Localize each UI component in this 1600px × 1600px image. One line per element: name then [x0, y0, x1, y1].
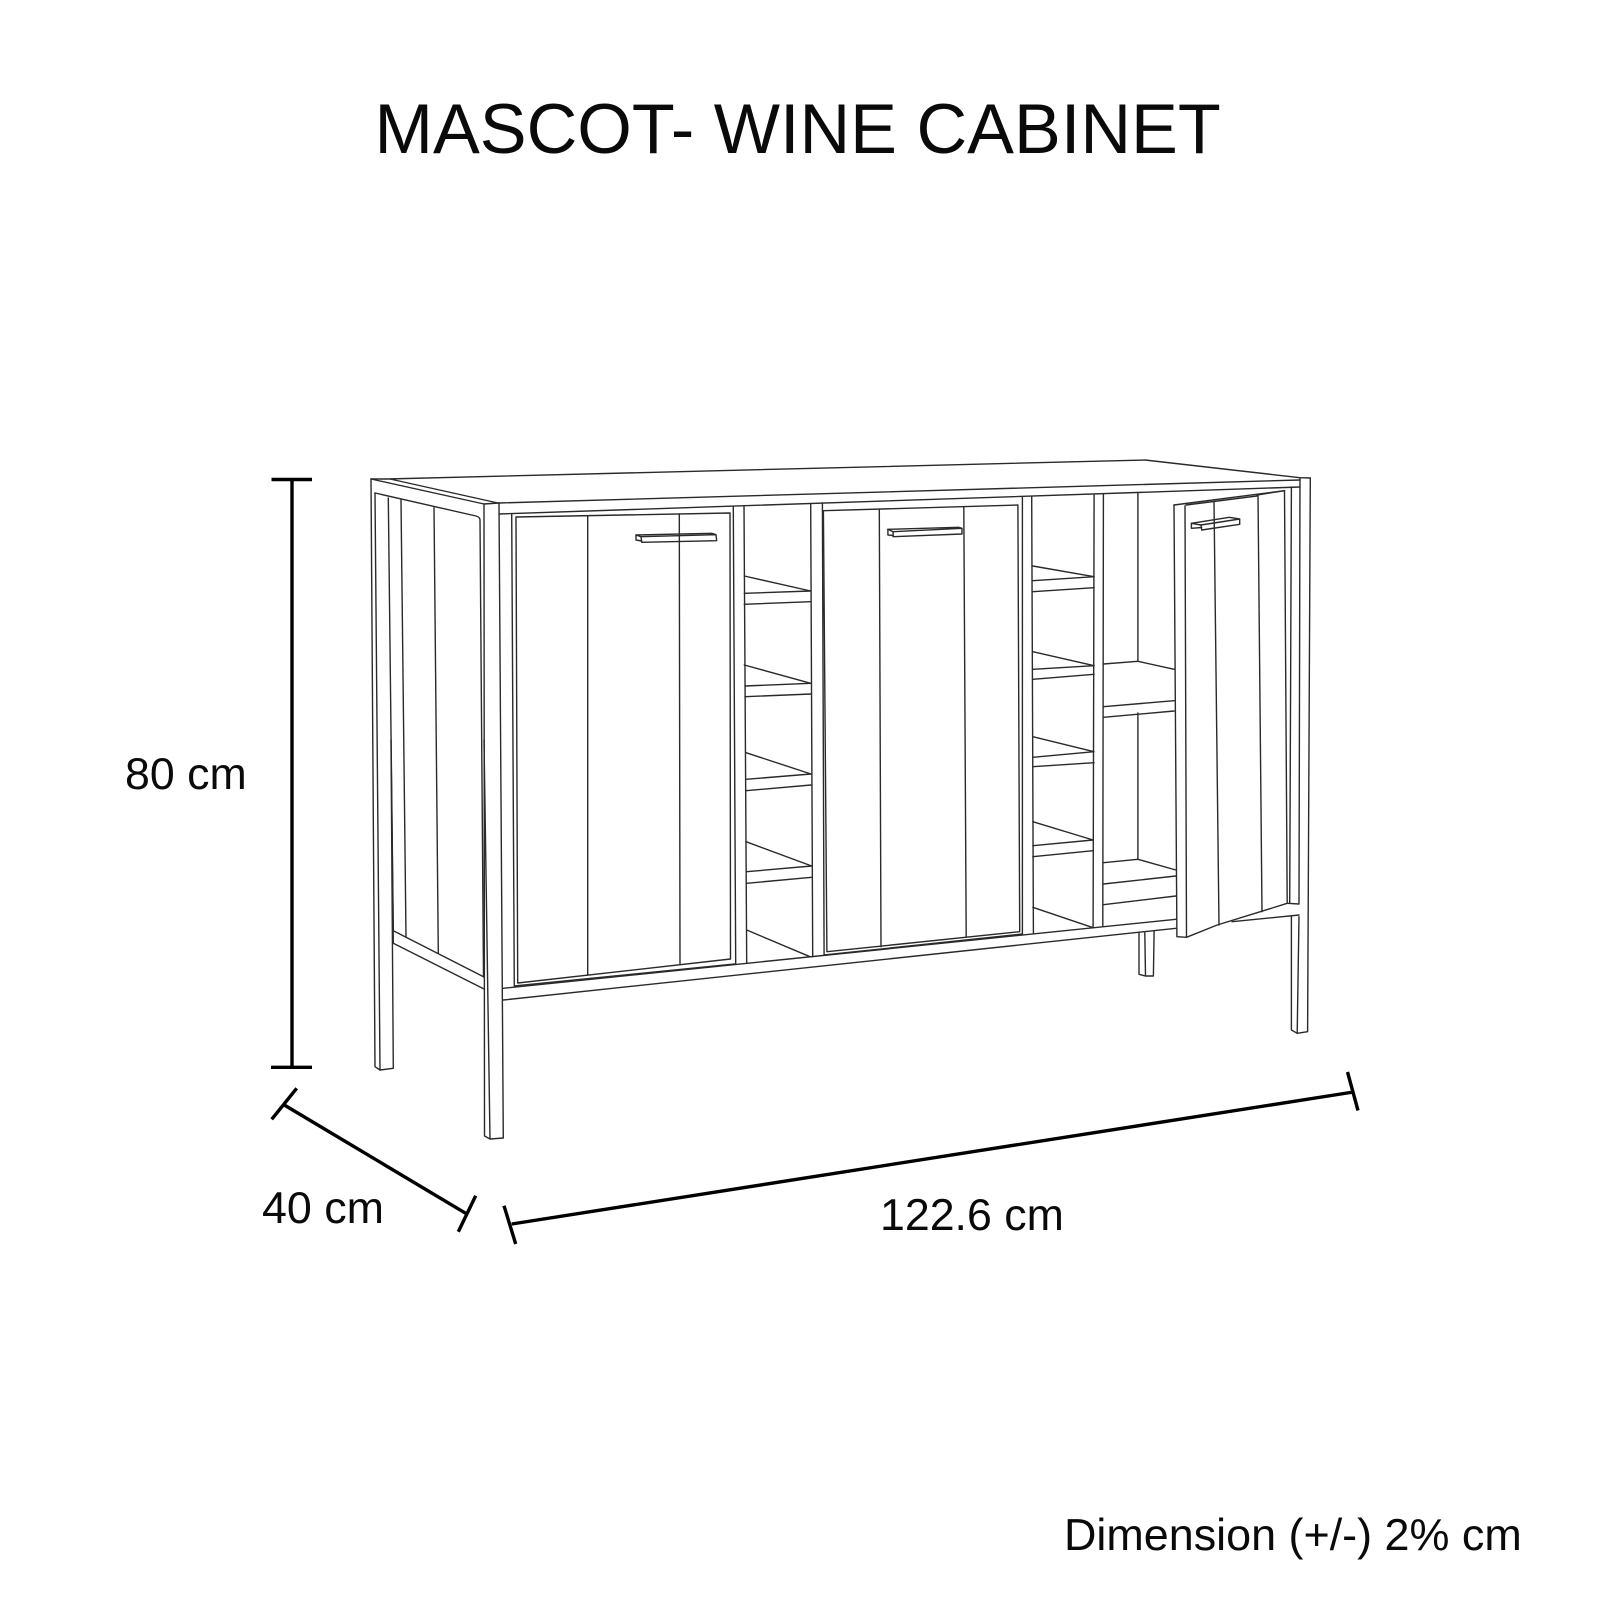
wine shelves left column	[744, 576, 812, 957]
open compartment with shelves	[1103, 493, 1176, 905]
centre door	[822, 503, 1022, 955]
width label: 122.6 cm	[880, 1191, 1064, 1240]
left side panel	[375, 493, 484, 989]
bottom rail	[503, 919, 1176, 1000]
wine shelves right column	[1033, 566, 1094, 928]
tabletop	[371, 460, 1310, 514]
left door	[512, 513, 735, 986]
front left leg	[484, 503, 503, 1139]
tolerance note: Dimension (+/-) 2% cm	[1064, 1509, 1522, 1560]
cabinet line drawing	[371, 460, 1310, 1139]
depth dimension arrow	[272, 1088, 476, 1232]
back right leg	[1139, 932, 1154, 976]
frame stiles	[733, 494, 1103, 964]
width dimension arrow	[504, 1072, 1358, 1244]
back left leg	[371, 479, 393, 1070]
height label: 80 cm	[125, 750, 247, 799]
depth label: 40 cm	[262, 1183, 384, 1233]
title: MASCOT- WINE CABINET	[374, 89, 1221, 168]
open right door	[1174, 491, 1287, 937]
centre door handle	[888, 527, 962, 537]
right leg and side rail	[1232, 478, 1310, 1033]
right door handle	[1191, 517, 1240, 530]
height dimension arrow	[271, 480, 312, 1067]
left door handle	[636, 533, 717, 542]
